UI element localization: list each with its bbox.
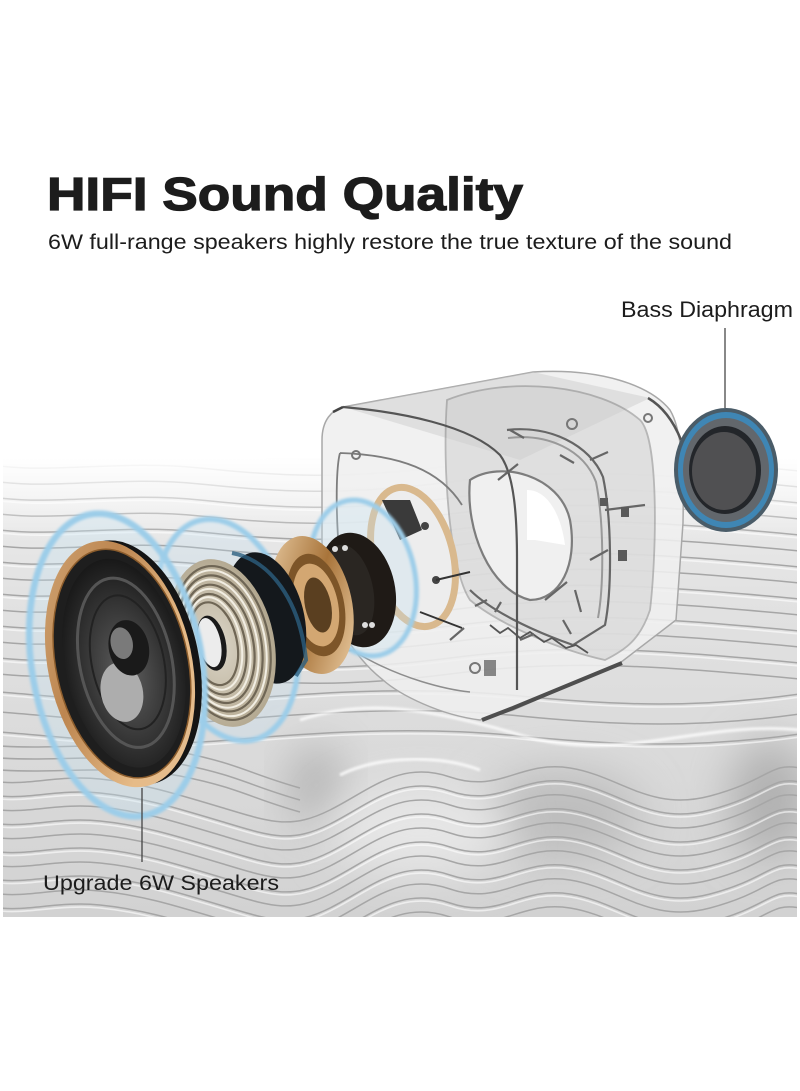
subtitle: 6W full-range speakers highly restore the true texture of the sound	[48, 230, 732, 254]
black magnet	[213, 544, 319, 692]
title: HIFI Sound Quality	[47, 168, 523, 220]
blue sound halo: middle	[134, 504, 320, 756]
bass diaphragm driver	[674, 408, 778, 532]
rear gold ring with terminals	[357, 478, 470, 636]
voice coil frame	[308, 525, 406, 655]
blue sound halo: rear	[296, 490, 430, 666]
gold plate	[258, 528, 366, 682]
blue sound halo: front	[7, 500, 227, 830]
wavy sound background	[3, 465, 797, 917]
front woofer	[24, 525, 223, 801]
transparent speaker housing	[322, 371, 683, 720]
label: upgrade speakers: Upgrade 6W Speakers	[43, 872, 279, 895]
leader line: bass diaphragm	[724, 328, 726, 408]
ribbed spiral suspension	[153, 549, 291, 737]
internal screws and brackets	[352, 414, 652, 676]
leader line: upgrade speakers	[141, 788, 143, 862]
label: bass diaphragm: Bass Diaphragm	[621, 297, 793, 322]
